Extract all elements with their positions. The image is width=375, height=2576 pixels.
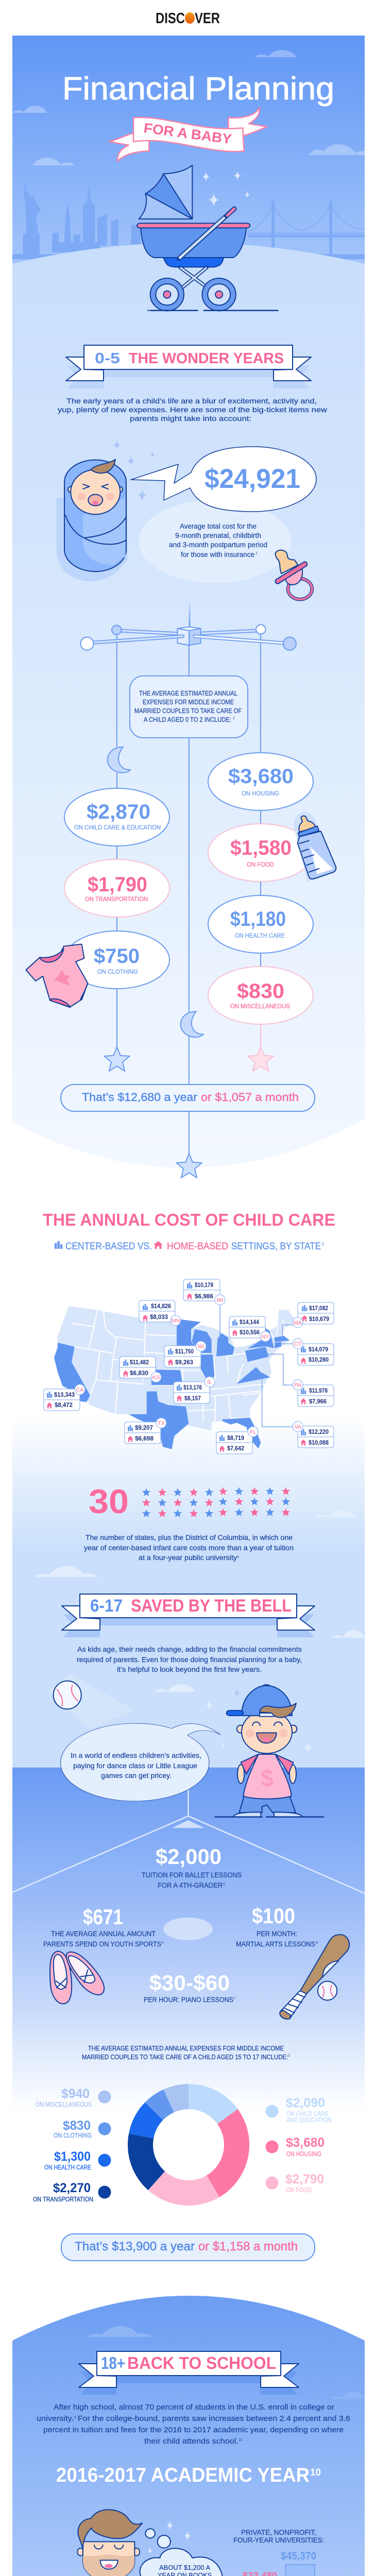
state card: IL: $8,157 xyxy=(184,1396,201,1402)
cost bubble: health care: $1,180 xyxy=(230,908,286,930)
chart: private nonprofit universities: PRIVATE, NONPROFIT, xyxy=(241,2528,316,2536)
state card: MI: $10,178 xyxy=(195,1282,214,1289)
cost bubble: transportation xyxy=(64,859,169,917)
stat: youth sports 671: PARENTS SPEND ON YOUTH SPORTS xyxy=(43,1940,161,1948)
total pill: 13,900 a year: That’s $13,900 a year xyxy=(75,2240,195,2253)
top logo: O xyxy=(185,10,195,27)
text box: average annual expenses age 0-2: THE AVERAGE ESTIMATED ANNUAL xyxy=(139,690,237,697)
icon: moon left xyxy=(108,747,130,773)
text: average expenses age 15-17: THE AVERAGE ESTIMATED ANNUAL EXPENSES FOR MIDDLE INCOME xyxy=(88,2044,284,2052)
state card: MA: MA xyxy=(294,1320,302,1326)
stat: martial arts 100: PER MONTH: xyxy=(257,1930,297,1938)
text: after high school: percent in tuition and fees for the 2016 to 2017 academic year, depending on where xyxy=(43,2426,344,2434)
legend: miscellaneous: ON MISCELLANEOUS xyxy=(36,2101,92,2108)
state card: FL xyxy=(216,1427,258,1454)
legend: child care and education xyxy=(266,2096,331,2124)
state card: KS: KS xyxy=(152,1375,160,1381)
text: as kids age: it’s helpful to look beyond the first few years. xyxy=(117,1665,262,1673)
state card: TX xyxy=(125,1418,166,1444)
legend: transportation xyxy=(33,2181,111,2203)
stat: ballet 2,000: $2,000 xyxy=(156,1844,221,1869)
total pill: 12,680 a year xyxy=(61,1084,315,1111)
legend: food: $2,790 xyxy=(285,2172,324,2187)
stat: youth sports 671: THE AVERAGE ANNUAL AMOUNT xyxy=(51,1930,156,1938)
speech bubble: children's activities xyxy=(61,1723,220,1801)
stat: martial arts 100: 8 xyxy=(316,1941,318,1945)
clouds in sky xyxy=(12,50,365,165)
legend: clothing xyxy=(54,2119,111,2139)
icon: pink onesie xyxy=(26,944,88,1007)
total pill: 12,680 a year: That’s $12,680 a year xyxy=(82,1091,197,1104)
state card: WI: WI xyxy=(197,1344,204,1350)
text: as kids age: required of parents. Even for those doing financial planning for a baby, xyxy=(77,1655,302,1664)
top logo xyxy=(156,10,220,27)
chart: private nonprofit universities xyxy=(233,2528,324,2576)
cost bubble: transportation: ON TRANSPORTATION xyxy=(85,895,148,903)
text box: average annual expenses age 0-2: 2 xyxy=(233,717,235,720)
home plate and pitcher mound xyxy=(163,1820,213,1940)
ribbon: for a baby: FOR A BABY xyxy=(143,120,233,147)
total pill: 12,680 a year: or $1,057 a month xyxy=(201,1091,299,1104)
stat: piano 30-60: PER HOUR: PIANO LESSONS xyxy=(144,1996,233,2004)
state card: CA: CA xyxy=(76,1387,84,1393)
speech bubble: children's activities: games can get pricey. xyxy=(101,1771,172,1780)
icon: pacifier xyxy=(275,550,312,599)
heading: academic year: 10 xyxy=(310,2467,321,2478)
title: Financial Planning xyxy=(62,71,334,107)
cost bubble: food: $1,580 xyxy=(230,837,292,859)
stat: youth sports 671 xyxy=(43,1905,164,1948)
top logo: DISC xyxy=(156,10,185,27)
callout: average total cost: 1 xyxy=(255,552,258,555)
intro paragraph xyxy=(58,397,328,422)
banner: 18+ back to school: BACK TO SCHOOL xyxy=(127,2353,276,2372)
clouds college xyxy=(88,2326,365,2399)
cost bubble: miscellaneous: $830 xyxy=(237,980,284,1003)
state card: CT: $10,280 xyxy=(309,1357,329,1363)
speech bubble: children's activities: In a world of endless children’s activities, xyxy=(71,1751,201,1759)
cost bubble: child care and education xyxy=(64,788,169,846)
state card: NY: $10,556 xyxy=(240,1330,260,1336)
intro paragraph: parents might take into account: xyxy=(130,414,251,422)
legend: health care xyxy=(44,2149,111,2171)
cost bubble: health care: ON HEALTH CARE xyxy=(235,932,285,939)
sparkles near student xyxy=(147,2520,191,2576)
speech bubble: children's activities: paying for dance class or Little League xyxy=(73,1761,197,1770)
city skyline and bridge xyxy=(12,183,365,259)
cost bubble: miscellaneous: ON MISCELLANEOUS xyxy=(230,1003,290,1010)
icon: swaddled baby xyxy=(57,460,127,581)
icon: boy with cap: $ xyxy=(261,1765,274,1791)
heading: academic year: 2016-2017 ACADEMIC YEAR xyxy=(56,2464,310,2486)
legend: health care: ON HEALTH CARE xyxy=(44,2164,91,2171)
callout: average total cost: $24,921 xyxy=(204,464,300,494)
text: 30 states explanation: The number of states, plus the District of Columbia, in which one xyxy=(86,1533,293,1541)
hanging stars xyxy=(104,1047,274,1178)
map: united states xyxy=(54,1301,298,1449)
state card: MI: $6,986 xyxy=(195,1294,213,1300)
state card: PA: $11,978 xyxy=(309,1388,328,1394)
text: after high school: 9 xyxy=(74,2416,76,2419)
stat: ballet 2,000: 5 xyxy=(223,1883,225,1887)
state card: KS xyxy=(120,1357,161,1382)
subheading: center vs home by state: HOME-BASED xyxy=(167,1241,228,1252)
stat: martial arts 100: MARTIAL ARTS LESSONS xyxy=(236,1940,315,1948)
cost bubble: housing: ON HOUSING xyxy=(242,790,279,797)
ribbon: for a baby xyxy=(109,108,267,161)
legend: housing: $3,680 xyxy=(286,2136,325,2150)
state card: CT: $14,079 xyxy=(309,1347,328,1353)
thought bubble: books and supplies: ABOUT $1,200 A xyxy=(159,2564,210,2571)
state card: CA xyxy=(44,1384,85,1411)
top logo: VER xyxy=(195,10,220,27)
icon: boy with cap xyxy=(215,1685,323,1817)
cost bubble: clothing: ON CLOTHING xyxy=(97,968,138,975)
state card: PA: PA xyxy=(294,1382,302,1388)
legend: health care: $1,300 xyxy=(54,2149,91,2164)
stat: ballet 2,000: FOR A 4TH-GRADER xyxy=(158,1882,223,1889)
stat: ballet 2,000: TUITION FOR BALLET LESSONS xyxy=(142,1871,242,1879)
cost bubble: child care and education: $2,870 xyxy=(87,801,150,823)
text: after high school: their child attends school. xyxy=(144,2437,238,2446)
state card: MA: $17,082 xyxy=(309,1306,328,1312)
state card: MN: $8,033 xyxy=(150,1314,168,1320)
cost bubble: food xyxy=(208,824,313,882)
state card: IL: $13,176 xyxy=(183,1385,202,1391)
text box: average annual expenses age 0-2: MARRIED COUPLES TO TAKE CARE OF xyxy=(134,707,242,715)
state card: MN xyxy=(139,1300,181,1326)
stat: martial arts 100: $100 xyxy=(252,1904,295,1928)
star grid xyxy=(142,1487,290,1517)
state card: KS: $6,830 xyxy=(130,1370,148,1377)
text: after high school: After high school, almost 70 percent of students in the U.S. enroll in college or xyxy=(54,2403,334,2412)
state card: WI: $11,750 xyxy=(175,1349,194,1355)
cost bubble: clothing: $750 xyxy=(94,945,140,968)
state card: CT: CT xyxy=(294,1341,302,1347)
state card: MI: MI xyxy=(217,1297,223,1303)
cost bubble: housing xyxy=(208,753,313,810)
text box: average annual expenses age 0-2 xyxy=(130,676,248,738)
text: as kids age xyxy=(77,1645,302,1673)
callout: average total cost xyxy=(131,447,316,583)
legend: clothing: $830 xyxy=(63,2119,91,2133)
legend: transportation: $2,270 xyxy=(53,2181,91,2195)
icon: ballet shoes xyxy=(50,1951,104,2004)
stat: ballet 2,000 xyxy=(142,1844,242,1889)
text box: average annual expenses age 0-2: EXPENSES FOR MIDDLE INCOME xyxy=(143,699,234,706)
state card: VA xyxy=(293,1421,334,1448)
stat: 30: 30 xyxy=(89,1482,129,1520)
intro paragraph: The early years of a child’s life are a blur of excitement, activity and, xyxy=(66,397,317,405)
sparkles near baby xyxy=(113,440,155,501)
state card: CA: $8,472 xyxy=(55,1402,73,1409)
text: average expenses age 15-17 xyxy=(82,2044,290,2061)
callout: average total cost: and 3-month postpartum period xyxy=(169,541,267,549)
banner: 6-17 saved by the bell: 6-17 xyxy=(90,1596,123,1616)
heading: annual cost of child care: THE ANNUAL COST OF CHILD CARE xyxy=(43,1210,335,1229)
cost bubble: transportation: $1,790 xyxy=(88,873,147,896)
small cloud and sparkles by boy xyxy=(154,1684,312,1754)
state card: CT xyxy=(293,1338,334,1365)
text: as kids age: As kids age, their needs change, adding to the financial commitments xyxy=(77,1645,302,1653)
stat: piano 30-60: 7 xyxy=(233,1997,235,2001)
state card: PA: $7,966 xyxy=(309,1399,327,1405)
banner: 18+ back to school: 18+ xyxy=(101,2353,125,2372)
state card: TX: TX xyxy=(158,1420,165,1427)
cost bubble: health care xyxy=(208,895,313,953)
state card: TX: $9,207 xyxy=(135,1425,153,1431)
cost bubble: housing: $3,680 xyxy=(228,765,294,788)
state card: NY xyxy=(229,1316,270,1342)
state card: MN: MN xyxy=(171,1318,180,1324)
panel: baseball field xyxy=(12,1767,365,2112)
state card: FL: $7,642 xyxy=(227,1446,244,1452)
subheading: center vs home by state: SETTINGS, BY STATE xyxy=(231,1241,321,1252)
icon: baby bottle xyxy=(294,812,336,882)
callout: average total cost: 9-month prenatal, childbirth xyxy=(175,532,261,539)
text: 30 states explanation: year of center-based infant care costs more than a year of tuition xyxy=(84,1544,294,1552)
text: 30 states explanation: 4 xyxy=(237,1555,239,1559)
total pill: 13,900 a year xyxy=(61,2234,315,2261)
state card: IL xyxy=(174,1377,215,1403)
chart: private nonprofit universities: $45,370 xyxy=(281,2550,316,2562)
cost bubble: child care and education: ON CHILD CARE & EDUCATION xyxy=(74,824,161,831)
legend: housing xyxy=(266,2136,325,2158)
intro paragraph: yup, plenty of new expenses. Here are some of the big-ticket items new xyxy=(58,405,328,414)
legend: clothing: ON CLOTHING xyxy=(54,2132,92,2139)
text: 30 states explanation: at a four-year public university xyxy=(139,1553,237,1562)
clouds middle xyxy=(35,1510,365,1638)
panel: college section xyxy=(12,2296,365,2576)
legend: child care and education: AND EDUCATION xyxy=(286,2116,331,2124)
banner: 18+ back to school xyxy=(79,2351,299,2395)
banner: 6-17 saved by the bell: SAVED BY THE BELL xyxy=(131,1596,292,1616)
icon: student at laptop xyxy=(55,2510,324,2576)
callout: average total cost: Average total cost for the xyxy=(180,522,257,530)
icon: flying baseball xyxy=(48,1673,134,1730)
state card: CA: $13,343 xyxy=(54,1392,75,1398)
legend: miscellaneous xyxy=(36,2087,111,2108)
legend: child care and education: $2,090 xyxy=(286,2096,325,2110)
banner: 0-5 the wonder years: 0-5 xyxy=(95,350,120,367)
text: after high school: 10 xyxy=(238,2438,243,2442)
state card: FL: $8,719 xyxy=(227,1435,244,1442)
icon: moon center xyxy=(181,1011,203,1037)
state card: MN: $14,826 xyxy=(151,1303,171,1310)
state card: MI xyxy=(183,1279,225,1305)
banner: 0-5 the wonder years xyxy=(66,345,311,388)
icon: baseball bat and ball xyxy=(280,1935,349,2019)
state card: VA: VA xyxy=(294,1424,302,1430)
donut chart xyxy=(128,2084,249,2206)
subheading: center vs home by state: CENTER-BASED VS. xyxy=(65,1241,152,1252)
stat: piano 30-60 xyxy=(144,1971,235,2004)
stat: youth sports 671: $671 xyxy=(83,1905,123,1929)
subheading: center vs home by state xyxy=(55,1241,324,1252)
legend: food: ON FOOD xyxy=(286,2187,312,2194)
state card: MA xyxy=(293,1302,334,1328)
banner: 6-17 saved by the bell xyxy=(62,1594,315,1637)
state card: WI xyxy=(164,1341,206,1367)
state card: KS: $11,482 xyxy=(130,1360,149,1366)
cost bubble: food: ON FOOD xyxy=(247,861,274,868)
banner: 0-5 the wonder years: THE WONDER YEARS xyxy=(129,350,284,367)
legend: food xyxy=(266,2172,324,2194)
text: average expenses age 15-17: MARRIED COUPLES TO TAKE CARE OF A CHILD AGED 15 TO 17 INCLUDE: xyxy=(82,2053,288,2061)
chart: private nonprofit universities: FOUR-YEAR UNIVERSITIES: xyxy=(233,2536,324,2544)
sparkles around stroller xyxy=(202,171,250,207)
subheading: center vs home by state: 3 xyxy=(321,1242,324,1247)
state card: VA: $12,220 xyxy=(309,1429,329,1435)
legend: child care and education: ON CHILD CARE xyxy=(286,2110,329,2117)
state card: TX: $6,698 xyxy=(135,1436,154,1442)
panel: sky header xyxy=(12,36,365,268)
legend: miscellaneous: $940 xyxy=(61,2087,90,2101)
panel: hill background xyxy=(12,243,365,1168)
legend: transportation: ON TRANSPORTATION xyxy=(33,2196,93,2203)
cost bubble: miscellaneous xyxy=(208,967,313,1024)
state card: VA: $10,088 xyxy=(309,1440,329,1446)
text: after high school: university. xyxy=(37,2414,74,2423)
total pill: 13,900 a year: or $1,158 a month xyxy=(198,2240,298,2253)
text: after high school xyxy=(37,2403,350,2446)
field lines xyxy=(12,1788,365,1893)
legend: housing: ON HOUSING xyxy=(286,2150,321,2158)
callout: average total cost: for those with insurance xyxy=(181,551,254,558)
text: 30 states explanation xyxy=(84,1533,294,1562)
stat: piano 30-60: $30-$60 xyxy=(149,1971,230,1995)
connector lines left and right columns xyxy=(117,773,261,1048)
state card: PA xyxy=(293,1380,334,1406)
crib mobile frame xyxy=(80,599,296,1154)
state card: FL: FL xyxy=(250,1429,256,1435)
thought bubble: books and supplies xyxy=(140,2529,223,2576)
state card: NY: $14,144 xyxy=(240,1319,260,1326)
state card: MA: $10,679 xyxy=(309,1316,329,1323)
state card: IL: IL xyxy=(207,1379,212,1385)
icon: baby stroller xyxy=(137,165,278,311)
text box: average annual expenses age 0-2: A CHILD AGED 0 TO 2 INCLUDE: xyxy=(144,716,231,723)
text: average expenses age 15-17: 2 xyxy=(288,2054,290,2058)
panel: lower map gradient xyxy=(12,1417,365,1770)
text: after high school: For the college-bound, parents saw increases between 2.4 percent and 3.6 xyxy=(78,2414,350,2423)
state card: WI: $9,263 xyxy=(175,1360,193,1366)
cost bubble: clothing xyxy=(64,931,169,989)
state card: NY: NY xyxy=(261,1334,269,1340)
stat: martial arts 100 xyxy=(236,1904,318,1948)
stat: youth sports 671: 6 xyxy=(162,1941,164,1945)
